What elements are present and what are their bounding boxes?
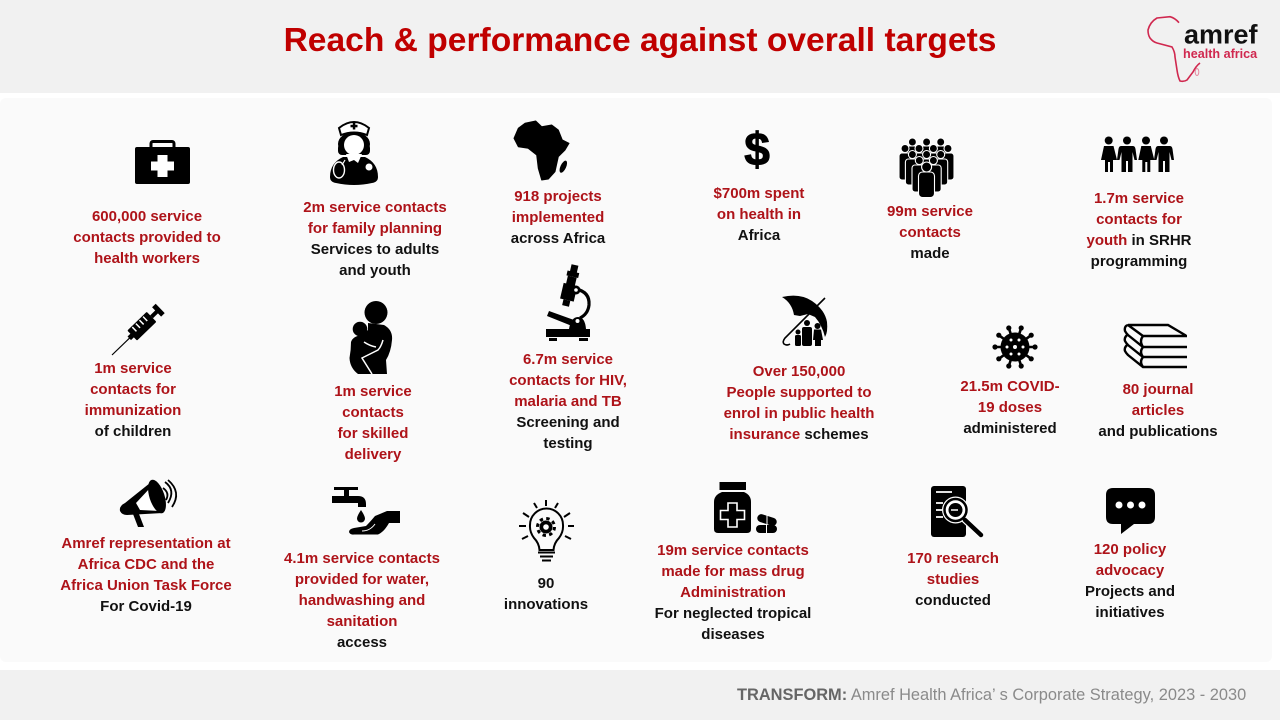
icon: light bulb with gear <box>517 497 576 564</box>
item: innovations <box>496 497 596 614</box>
text: representation <box>60 534 232 614</box>
item: representation <box>60 479 232 614</box>
text: money spent <box>714 184 804 244</box>
text: HIV malaria TB: testing <box>543 434 593 452</box>
icon: megaphone <box>120 479 178 527</box>
title: Reach & performance against overall targets <box>284 22 996 59</box>
item: COVID-19 doses <box>960 325 1060 436</box>
text: service contacts made <box>887 202 973 262</box>
header band <box>0 0 1280 93</box>
item: water and sanitation <box>277 485 447 652</box>
text: projects: implemented <box>512 208 604 226</box>
text: COVID-19 doses: 21.5m COVID- <box>960 378 1060 394</box>
text: policy advocacy <box>1075 538 1185 622</box>
text: projects <box>511 188 606 246</box>
text: research studies: conducted <box>915 592 991 608</box>
item: service contacts made <box>887 138 973 262</box>
icon: Africa map <box>514 120 570 180</box>
text: journal articles: articles <box>1132 402 1184 418</box>
text: immunization: contacts for <box>90 380 176 398</box>
text: HIV malaria TB: Screening and <box>516 414 620 430</box>
text: health insurance: enrol in public health <box>724 404 874 422</box>
text: health workers <box>73 208 221 266</box>
text: HIV malaria TB: malaria and TB <box>514 392 622 410</box>
text: youth SRHR: contacts for <box>1096 210 1182 228</box>
item: skilled delivery <box>334 301 412 462</box>
text: water and sanitation: access <box>337 634 387 650</box>
footer text: TRANSFORM: Amref Health Africa’ s Corporate Strategy, 2023 - 2030 <box>737 686 1246 704</box>
item: HIV malaria TB <box>509 264 627 452</box>
text: immunization: immunization <box>85 402 181 418</box>
item: health insurance <box>724 296 874 442</box>
text: journal articles <box>1098 380 1218 440</box>
icon: microscope <box>546 264 591 341</box>
text: health insurance: People supported to <box>726 384 872 400</box>
text: policy advocacy: initiatives <box>1095 604 1165 620</box>
icon: stack of books <box>1124 324 1187 368</box>
item: journal articles <box>1098 324 1218 440</box>
text: family planning <box>303 198 447 278</box>
panel: targets grid <box>0 98 1272 662</box>
logo: amref health africa <box>1147 16 1259 82</box>
text: skilled delivery: 1m service <box>334 382 412 400</box>
text: money spent: Africa <box>738 226 780 244</box>
item: family planning <box>303 121 447 278</box>
text: innovations: 90 <box>538 574 554 592</box>
text: health insurance: insurance schemes <box>729 426 869 442</box>
text: family planning: and youth <box>339 262 411 278</box>
icon: tap and hand <box>330 485 402 537</box>
text: mass drug administration: diseases <box>701 626 765 642</box>
text: mass drug administration <box>648 540 818 644</box>
text: journal articles: 80 journal <box>1123 380 1193 398</box>
text: water and sanitation: provided for water, <box>295 570 429 588</box>
logo: amref health africa: health africa <box>1183 47 1258 61</box>
text: health workers: 600,000 service <box>92 208 202 224</box>
text: innovations: innovations <box>504 596 588 612</box>
item: money spent <box>714 123 804 244</box>
text: research studies: studies <box>927 570 979 588</box>
item: projects <box>511 120 606 246</box>
icon: crowd <box>900 138 954 197</box>
text: family planning: 2m service contacts <box>303 198 447 216</box>
text: money spent: $700m spent <box>714 184 804 202</box>
text: mass drug administration: Administration <box>680 584 786 600</box>
text: mass drug administration: For neglected tropical <box>655 604 811 622</box>
text: representation: Amref representation at <box>61 534 231 552</box>
icon: syringe <box>112 304 165 356</box>
icon: mother and child <box>350 301 392 374</box>
icon: virus <box>992 325 1038 369</box>
text: HIV malaria TB: 6.7m service <box>523 350 613 368</box>
text: youth SRHR: 1.7m service <box>1094 190 1184 206</box>
item: immunization <box>85 304 181 440</box>
text: policy advocacy: advocacy <box>1096 562 1164 578</box>
text: journal articles: and publications <box>1098 422 1218 440</box>
icon: dollar sign: $ <box>744 123 770 175</box>
text: skilled delivery: delivery <box>345 446 401 462</box>
text: representation: Africa Union Task Force <box>60 576 232 594</box>
text: skilled delivery <box>334 382 412 462</box>
text: service contacts made: 99m service <box>887 202 973 220</box>
text: health insurance <box>724 362 874 442</box>
item: mass drug administration <box>648 480 818 644</box>
text: water and sanitation: 4.1m service contacts <box>284 550 440 566</box>
text: representation: Africa CDC and the <box>78 556 214 572</box>
text: immunization: 1m service <box>94 360 172 376</box>
icon: umbrella over family <box>782 296 828 346</box>
text: service contacts made: made <box>910 244 950 262</box>
text: health insurance: Over 150,000 <box>753 362 845 380</box>
text: innovations <box>496 572 596 614</box>
text: immunization: of children <box>95 422 171 440</box>
text: COVID-19 doses: administered <box>963 420 1057 436</box>
text: COVID-19 doses <box>960 378 1060 436</box>
text: policy advocacy: Projects and <box>1085 582 1175 600</box>
text: skilled delivery: contacts <box>342 404 404 420</box>
text: research studies <box>898 548 1008 610</box>
item: policy advocacy <box>1075 486 1185 622</box>
text: HIV malaria TB: contacts for HIV, <box>509 372 627 388</box>
text: representation: For Covid-19 <box>100 598 192 614</box>
text: water and sanitation <box>277 548 447 652</box>
text: youth SRHR: programming <box>1091 252 1187 270</box>
text: policy advocacy: 120 policy <box>1094 540 1166 558</box>
text: family planning: Services to adults <box>311 240 439 258</box>
text: projects: 918 projects <box>514 188 602 204</box>
logo: amref health africa: amref <box>1184 20 1259 50</box>
text: projects: across Africa <box>511 230 605 246</box>
text: water and sanitation: sanitation <box>327 612 397 630</box>
icon: medicine bottle and pills <box>712 480 780 535</box>
icon: nurse <box>330 121 378 185</box>
item: research studies <box>898 484 1008 610</box>
text: youth SRHR: youth in SRHR <box>1086 232 1192 248</box>
text: COVID-19 doses: 19 doses <box>978 398 1042 416</box>
text: service contacts made: contacts <box>899 224 961 240</box>
icon: speech bubble <box>1104 486 1157 536</box>
icon: four people <box>1101 136 1174 172</box>
text: skilled delivery: for skilled <box>338 424 408 442</box>
text: research studies: 170 research <box>907 550 999 566</box>
text: health workers: contacts provided to <box>73 228 221 246</box>
icon: medical kit <box>135 140 190 184</box>
text: family planning: for family planning <box>308 220 442 236</box>
text: youth SRHR <box>1086 190 1192 270</box>
item: health workers <box>73 140 221 266</box>
text: mass drug administration: 19m service contacts <box>657 542 809 558</box>
footer band <box>0 670 1280 720</box>
item: youth SRHR <box>1086 136 1192 270</box>
text: water and sanitation: handwashing and <box>299 592 425 608</box>
icon: document with magnifier <box>929 484 985 539</box>
text: HIV malaria TB <box>509 350 627 452</box>
text: health workers: health workers <box>94 250 200 266</box>
text: immunization <box>85 360 181 440</box>
text: mass drug administration: made for mass drug <box>661 562 805 580</box>
text: money spent: on health in <box>717 206 801 222</box>
